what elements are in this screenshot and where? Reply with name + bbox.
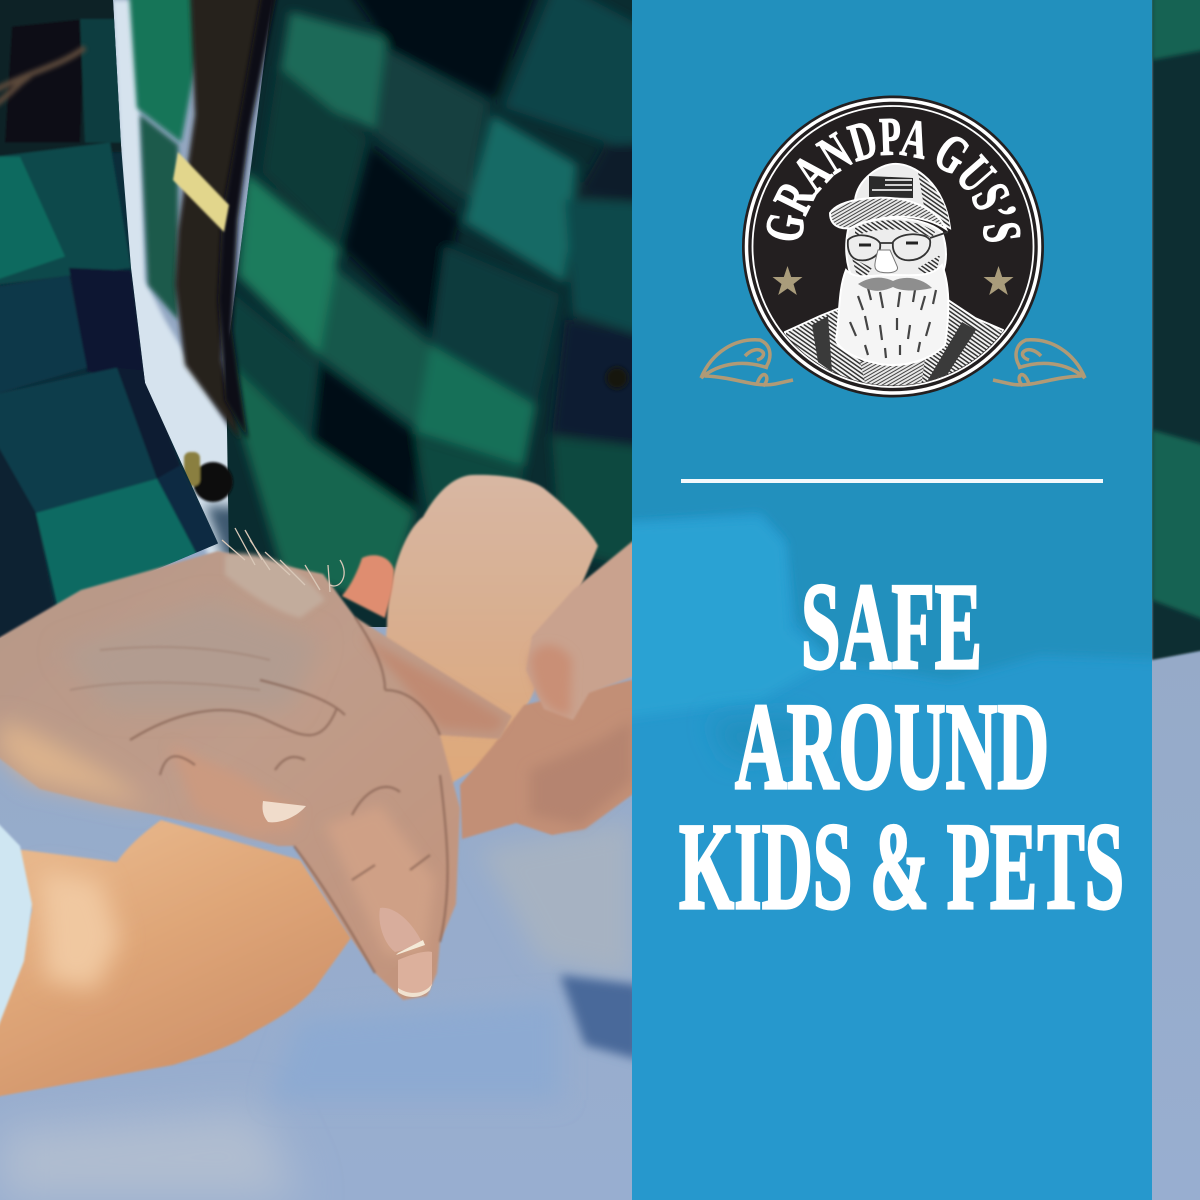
child's arm	[0, 820, 351, 1097]
mustache	[858, 278, 932, 291]
hat flag stripes	[872, 180, 912, 190]
grey upper hand tone	[97, 616, 306, 704]
suspenders	[812, 316, 976, 385]
rivet	[184, 452, 233, 502]
star right	[984, 266, 1014, 295]
fingernails	[263, 801, 306, 822]
ornament: left flourish	[701, 340, 793, 386]
illustration: bearded man	[785, 164, 1003, 400]
shirt front	[860, 360, 925, 386]
hat crown	[855, 164, 950, 228]
jeans highlight	[0, 1110, 300, 1200]
face shading	[852, 255, 940, 286]
forehead hatch	[855, 220, 935, 238]
hat side hatch	[918, 172, 950, 228]
green shirt panel behind strap	[129, 0, 198, 142]
hat brim	[830, 198, 946, 229]
hat flag	[869, 176, 913, 198]
strap dark edge	[218, 0, 278, 440]
child's sleeve	[0, 820, 32, 1035]
loose wrist hairs	[222, 528, 344, 592]
jeans blue fold	[270, 1000, 560, 1100]
wrist hair	[225, 553, 325, 618]
jeans pocket	[560, 975, 640, 1060]
jeans grey thigh	[480, 820, 632, 980]
undershirt	[112, 0, 300, 590]
right-side shirt	[1152, 0, 1200, 660]
beard	[836, 265, 948, 365]
nose	[875, 250, 898, 273]
elder's top hand	[0, 551, 512, 1000]
palm shading	[532, 729, 630, 821]
index finger warm tone	[178, 754, 292, 842]
hand creases	[70, 617, 448, 973]
divider line	[681, 479, 1103, 483]
shoulders and overalls	[784, 300, 1004, 386]
panel upper dark tone	[632, 0, 1152, 679]
ornament: right flourish	[993, 340, 1085, 386]
badge rings	[742, 96, 1044, 398]
heading line 1: SAFE	[801, 558, 982, 695]
shirt sleeve plaid	[0, 0, 230, 665]
lit lower edge of hand	[0, 720, 150, 805]
lower fingers warm tone	[330, 808, 432, 953]
panel ghost shape left	[632, 522, 820, 712]
elder's thumb	[526, 535, 640, 720]
panel ghost shadow	[724, 720, 793, 754]
panel: blue banner	[632, 0, 1152, 1200]
right-side plaid blocks	[1152, 0, 1200, 620]
face	[845, 218, 947, 276]
logo: Grandpa Gus's badge	[742, 96, 1044, 398]
elder's supporting palm	[460, 678, 640, 839]
child's forearm and fist behind	[380, 475, 598, 790]
thumb tip shading	[530, 645, 572, 715]
eyes	[859, 243, 918, 245]
shirt button	[606, 367, 628, 389]
arm highlight	[40, 870, 120, 990]
badge name text: GRANDPA GUS’S	[766, 118, 1020, 242]
dim shirt panel behind strap	[140, 115, 178, 320]
suspender strap	[175, 0, 272, 440]
hair over sleeve top	[0, 48, 85, 105]
shadowed undershirt near wrist	[205, 505, 345, 600]
beard shading	[850, 288, 936, 358]
child's fingers	[342, 555, 394, 618]
finger warm tone	[374, 643, 501, 732]
shirt torso plaid	[220, 0, 650, 646]
heading: Safe Around Kids & Pets	[679, 558, 1124, 935]
star left	[772, 266, 802, 295]
suspender clip	[173, 152, 229, 232]
glasses	[848, 232, 948, 260]
